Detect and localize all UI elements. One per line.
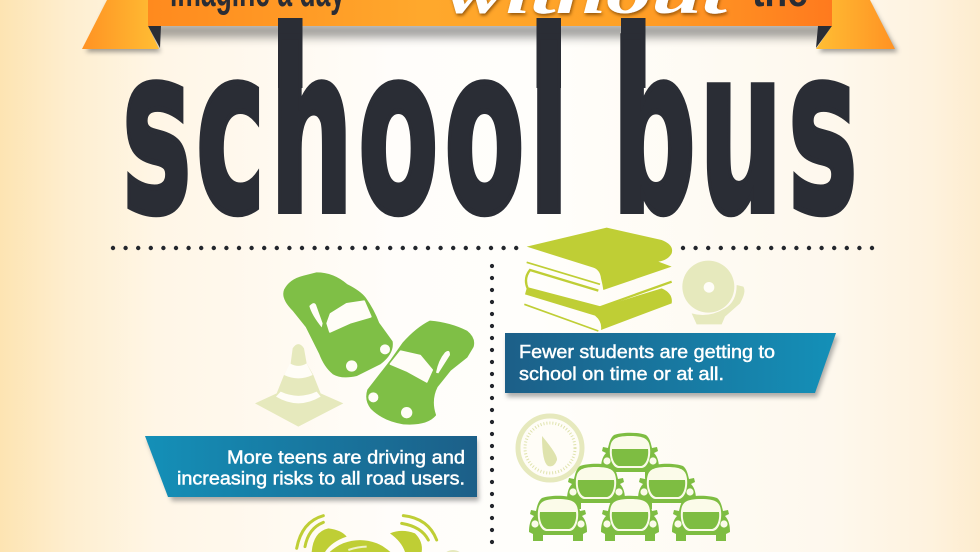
title: school bus: schoolbus xyxy=(122,0,858,266)
icon: crashed car one xyxy=(284,273,392,376)
icon: speed gauge xyxy=(518,416,582,480)
dotted divider: horizontal xyxy=(113,246,877,250)
banner text xyxy=(170,0,808,27)
callout: teen drivers: More teens are driving and xyxy=(227,448,465,468)
callout: teen drivers xyxy=(145,436,479,501)
icon: crashed car two xyxy=(367,322,473,424)
callout: fewer students: school on time or at all. xyxy=(519,364,724,384)
callout: teen drivers: increasing risks to all road users. xyxy=(177,468,465,488)
icon: traffic cone xyxy=(255,344,343,427)
icon: stack of books xyxy=(524,228,672,331)
dotted divider: vertical xyxy=(490,266,494,549)
icon: traffic jam of cars xyxy=(529,433,730,541)
icon: alarm clock xyxy=(297,516,460,552)
callout: fewer students xyxy=(505,333,838,397)
icon: school bell xyxy=(682,261,744,324)
banner ribbon xyxy=(82,0,898,52)
callout: fewer students: Fewer students are getting to xyxy=(519,342,775,362)
